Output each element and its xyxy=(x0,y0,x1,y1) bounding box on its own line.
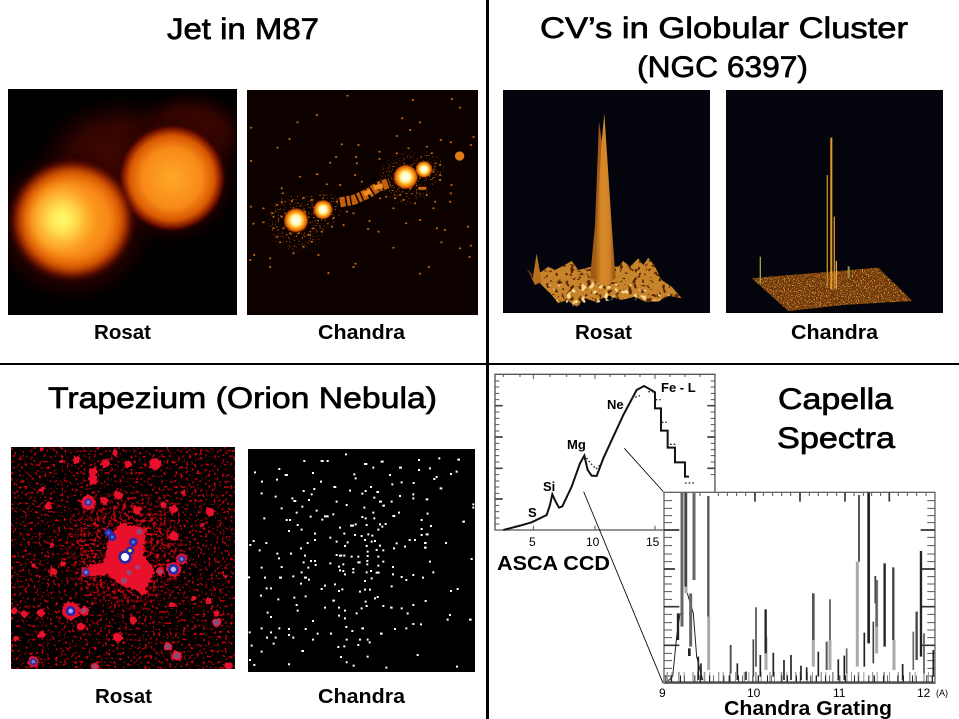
axis numbers: 9 xyxy=(659,686,666,700)
axis numbers: 5 xyxy=(529,535,536,549)
panel: Jet in M87 xyxy=(0,13,478,344)
peak labels: S xyxy=(528,505,537,520)
image: CV Rosat xyxy=(503,90,710,313)
axis numbers xyxy=(529,535,660,549)
axis numbers: 12 xyxy=(917,686,931,700)
chart: Chandra Grating spectrum xyxy=(659,492,948,719)
image: CV Chandra xyxy=(726,90,943,313)
title: Capella Spectra xyxy=(777,383,895,455)
peak labels xyxy=(528,380,696,520)
peak labels: Mg xyxy=(567,437,586,452)
label: Rosat: Rosat xyxy=(95,686,152,708)
title: Jet in M87: Jet in M87 xyxy=(167,13,319,46)
title: Capella Spectra: Spectra xyxy=(777,422,895,455)
image: Trapezium Chandra xyxy=(248,449,475,672)
panel: CVs in Globular Cluster xyxy=(503,12,943,344)
title: CV's in Globular Cluster (NGC 6397) xyxy=(540,12,908,84)
panel: Capella Spectra xyxy=(495,374,948,719)
divider: horizontal xyxy=(0,363,959,365)
peak labels: Si xyxy=(543,479,555,494)
title: CV's in Globular Cluster (NGC 6397): CV’s in Globular Cluster xyxy=(540,12,908,45)
label: Rosat: Rosat xyxy=(575,322,632,344)
title: CV's in Globular Cluster (NGC 6397): (NGC 6397) xyxy=(637,51,808,84)
label: Chandra: Chandra xyxy=(318,322,406,344)
title: Trapezium (Orion Nebula): Trapezium (Orion Nebula) xyxy=(48,382,437,415)
image: M87 Rosat xyxy=(0,89,250,315)
peak labels: Ne xyxy=(607,397,624,412)
image: Trapezium Rosat xyxy=(11,447,235,671)
label: ASCA CCD: ASCA CCD xyxy=(497,553,610,575)
title: Capella Spectra: Capella xyxy=(778,383,893,416)
peak labels: Fe - L xyxy=(661,380,696,395)
label: Chandra: Chandra xyxy=(318,686,406,708)
chart: ASCA CCD spectrum xyxy=(495,374,715,683)
axis numbers xyxy=(659,686,948,700)
axis numbers: 15 xyxy=(646,535,660,549)
panel: Trapezium xyxy=(11,382,475,708)
axis numbers: 10 xyxy=(586,535,600,549)
axis numbers: 11 xyxy=(833,686,846,700)
axis numbers: (A) xyxy=(936,688,948,698)
label: Rosat: Rosat xyxy=(94,322,151,344)
divider: vertical xyxy=(486,0,489,719)
label: Chandra: Chandra xyxy=(791,322,879,344)
image: M87 Chandra xyxy=(247,90,478,315)
axis numbers: 10 xyxy=(747,686,761,700)
